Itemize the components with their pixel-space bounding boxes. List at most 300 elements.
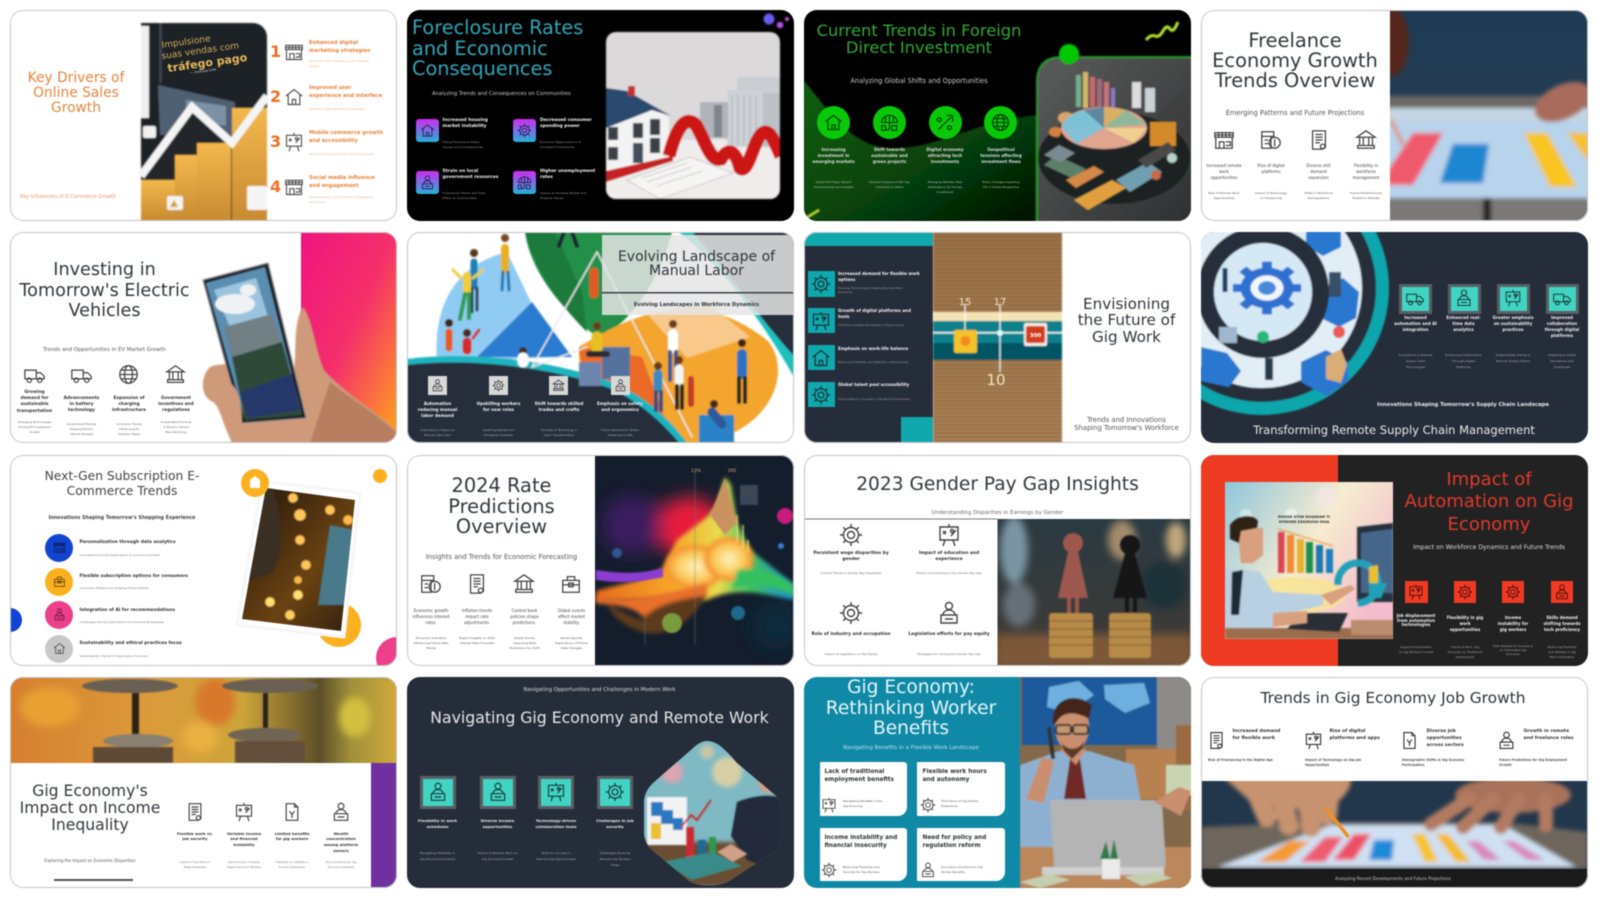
title — [20, 783, 160, 834]
item text 4: Adapting to Global — [1548, 352, 1576, 356]
illustration: sales chart photo: tráfego pago — [167, 51, 248, 75]
item heading 3: government resources — [442, 175, 498, 180]
title: Overview — [456, 515, 547, 538]
item heading 1 — [1394, 314, 1437, 332]
item text 4 — [308, 195, 374, 204]
item text 2: impact rate — [465, 614, 489, 619]
item heading 1: sustainable — [20, 402, 49, 407]
item heading 2: experience — [935, 557, 963, 562]
box text 1: Gig Economy — [843, 804, 863, 808]
item text 4: Trades and Crafts — [607, 432, 633, 436]
box text 1 — [843, 798, 882, 808]
item heading 2: time data — [1452, 320, 1475, 326]
icon: board — [821, 797, 837, 813]
item text 2 — [868, 180, 910, 188]
icon: document — [1207, 731, 1226, 750]
item text 3: Sustainability Trends in — [1496, 352, 1530, 356]
item heading 2: spending power — [540, 124, 580, 129]
panel: electric vehicles — [10, 232, 397, 443]
item heading 2 — [481, 818, 514, 830]
item note 2 — [459, 636, 495, 646]
item text 3: Destinations for Foreign — [928, 184, 962, 188]
title — [1078, 296, 1175, 346]
item text 4: Economy Inequality — [328, 864, 354, 868]
title — [412, 16, 583, 80]
subtitle: Exploring the Impact on Economic Disparities — [44, 858, 136, 863]
icon tile 4 — [513, 171, 536, 194]
item text 1: Increased remote — [1206, 163, 1242, 168]
item heading 4: Government — [161, 396, 191, 401]
title: 2024 Rate — [452, 474, 551, 497]
item text 1: Dynamics — [838, 290, 852, 294]
icon: delivery truck — [24, 364, 45, 385]
box heading 1 — [824, 768, 894, 784]
item text 1: on Gig Workers' Income — [1399, 650, 1433, 654]
icon: umbrella — [517, 176, 532, 190]
item heading 3: Technology-driven — [536, 818, 576, 823]
item heading 3: practices — [1502, 326, 1524, 332]
title — [19, 260, 190, 322]
item heading 2: work — [1459, 621, 1471, 626]
item text 3: Foreclosure Trends and Their — [442, 190, 486, 194]
item text 4: Impact on Housing Market and — [540, 190, 586, 194]
panel: 2024 rate predictions — [407, 455, 794, 666]
item heading 1: labor demand — [421, 412, 454, 418]
icon tile 1 — [1405, 581, 1428, 603]
item note 1: Rise of Remote Work — [1208, 191, 1240, 195]
item heading 2: green projects — [873, 159, 906, 164]
title: Gig Economy's — [32, 782, 148, 800]
title: Impact of — [1446, 468, 1532, 490]
title — [1212, 29, 1378, 92]
title — [45, 468, 199, 498]
item text 4: Remote Gig Workers — [600, 857, 630, 861]
item text 3: Labor Transformation — [544, 432, 574, 436]
item text 1: Evolving Technologies Shaping Remote Work — [838, 286, 903, 290]
item text 2 — [478, 850, 518, 862]
item heading 1 — [308, 39, 371, 54]
panel: key drivers of online sales growth — [10, 10, 397, 221]
item text 2: Sectoral Analysis of FDI: Key — [869, 180, 910, 184]
item heading 1: Personalization through data analytics — [80, 540, 176, 545]
item heading 1: investment in — [818, 153, 849, 158]
illustration: dark sidebar and wood timeline: 15 — [959, 297, 971, 308]
subtitle: Analyzing Global Shifts and Opportunities — [850, 76, 988, 84]
item text 3: Skills for Success in — [541, 851, 571, 855]
item heading 2 — [227, 830, 261, 848]
item heading 4: Higher unemployment — [540, 168, 595, 174]
box text 4: Worker Benefits — [941, 870, 965, 874]
icon: growth arrow — [936, 114, 954, 131]
item heading 1: from automation — [1397, 618, 1435, 623]
box heading 3 — [824, 834, 897, 851]
icon tile 4 — [1551, 581, 1573, 603]
icon tile 3 — [416, 171, 439, 194]
item text 4: Property Values — [540, 196, 563, 200]
item text 1: Enhanced User Experience and Website — [309, 59, 369, 63]
item text 1: rates. — [425, 620, 437, 625]
icon: tools — [1308, 129, 1330, 151]
subtitle: Navigating Opportunities and Challenges in Modern Work — [523, 687, 676, 693]
title: Gig Economy: — [847, 677, 975, 698]
subtitle: Impact on Workforce Dynamics and Future Trends — [1413, 544, 1565, 551]
item note 2 — [1255, 191, 1287, 202]
title: Impact on Income — [20, 799, 160, 817]
title: 2023 Gender Pay Gap Insights — [856, 474, 1139, 494]
item text 2: Factors Contributing to the Gender Pay Gap — [916, 570, 982, 574]
item text 2: Shaping Electric — [70, 427, 93, 431]
illustration: tilted photo and decorative circles — [10, 468, 398, 666]
subtitle: Key Influencers of E-Commerce Growth — [20, 194, 116, 200]
icon tile 2 — [808, 308, 834, 333]
title — [618, 250, 775, 278]
item text 1: influences interest — [412, 614, 450, 619]
illustration: people on pie chart — [407, 232, 794, 443]
item heading 3: Emphasis on work-life balance — [838, 346, 908, 351]
title: Trends in Gig Economy Job Growth — [1261, 689, 1525, 707]
item text 2 — [67, 422, 96, 437]
icon: briefcase — [560, 573, 582, 595]
item heading 1: technologies — [1402, 622, 1430, 627]
item text 2 — [483, 428, 514, 438]
item heading 4 — [308, 174, 376, 189]
icon: regulation columns — [165, 364, 186, 385]
item text 4: management — [1353, 175, 1379, 180]
panel: foreclosure rates — [407, 10, 794, 221]
item heading 3 — [442, 168, 499, 180]
icon: data board — [1504, 289, 1522, 307]
item text 3: Balancing Flexibility and Stability in Remote Jobs — [838, 360, 909, 364]
item heading 2: Upskilling workers — [477, 400, 520, 406]
item text 1 — [1399, 352, 1432, 370]
box heading 1: employment benefits — [824, 777, 894, 783]
panel: manual labor — [407, 232, 794, 443]
illustration: dark sidebar and wood timeline: 300 — [1030, 333, 1041, 339]
item text 1: Impact of Gig Work on — [180, 860, 210, 864]
item text 2 — [1305, 758, 1361, 768]
item text 1 — [18, 420, 51, 434]
item text 2: Government Policies — [67, 422, 96, 426]
icon frame 3 — [1497, 284, 1530, 314]
icon: craft — [552, 379, 565, 392]
illustration: dark sidebar and wood timeline: 17 — [994, 297, 1006, 308]
icon: store — [284, 88, 304, 106]
number 2: 2 — [270, 87, 281, 106]
panel: rethinking worker benefits — [804, 677, 1191, 888]
item note 1: Influencing Future Rate — [414, 640, 448, 644]
item heading 3 — [1492, 314, 1534, 332]
icon: people — [1554, 584, 1570, 600]
item note 4: Rate Changes — [561, 646, 582, 650]
item note 3 — [509, 636, 540, 650]
item heading 3: Integration of AI for recommendations — [80, 608, 175, 613]
number 1: 1 — [270, 42, 281, 61]
item text 2 — [540, 140, 582, 149]
item heading 4: Legislative efforts for pay equity — [908, 632, 990, 637]
box text 3: Security for Gig Workers — [843, 870, 880, 874]
item heading 4: investment flows — [981, 159, 1021, 164]
item heading 2: Enhanced real- — [1446, 314, 1481, 320]
item text 1 — [412, 608, 450, 626]
icon: presentation board — [937, 523, 961, 547]
item text 2: Gig Economy: A Double- — [228, 860, 260, 864]
item heading 3: trades and crafts — [539, 406, 579, 412]
item text 3: Challenges Facing Subscription E-commerce Businesses — [80, 620, 164, 624]
item heading 3 — [535, 400, 583, 412]
illustration: ring with blue gear network — [1201, 232, 1588, 443]
item text 4: Policy Solutions for Gig — [326, 860, 356, 864]
item text 2 — [462, 608, 492, 626]
item note 3: Global Events — [514, 636, 535, 640]
item heading 3: infrastructure — [112, 408, 146, 413]
number 3: 3 — [270, 132, 281, 151]
item heading 4: and ergonomics — [601, 406, 639, 412]
item text 2: Enhancing Collaboration — [1445, 352, 1482, 356]
item heading 2 — [870, 146, 908, 165]
item heading 2 — [308, 84, 382, 99]
box heading 2: and autonomy — [922, 777, 969, 783]
item text 1: Global FDI Flows: Recent — [816, 180, 851, 184]
icon circle 1 — [45, 534, 73, 562]
icon: gears — [811, 385, 831, 405]
box heading 2 — [922, 768, 987, 784]
title: Growth — [51, 100, 101, 116]
icon: board — [811, 311, 831, 331]
icon: spending gear — [517, 123, 532, 138]
item text 3: Economy — [1506, 652, 1520, 656]
item text 4: Techniques — [309, 200, 326, 204]
item text 3: Mobile Commerce Growth and Accessibility — [309, 152, 374, 156]
item note 1 — [1208, 191, 1240, 202]
box text 4: Innovative Solutions for Gig — [941, 864, 983, 868]
item text 4: in Electric Vehicle — [163, 424, 189, 428]
item text 2: Impact of Technology on Gig Job — [1305, 758, 1361, 762]
item note 4 — [1350, 191, 1382, 202]
icon: social camera — [284, 179, 304, 196]
item text 1 — [308, 59, 370, 68]
item heading 2: in battery — [70, 402, 93, 407]
item text 2: Economic Repercussions of — [540, 140, 581, 144]
item heading 1: schedules — [427, 824, 448, 829]
item text 2: platforms — [1261, 169, 1281, 174]
item text 3 — [442, 190, 486, 200]
item heading 4: tensions affecting — [980, 153, 1022, 158]
illustration: dark sidebar and wood timeline: 10 — [986, 371, 1006, 389]
item heading 2 — [64, 396, 99, 415]
illustration: house and red ribbon photo — [604, 12, 790, 200]
item note 3 — [1304, 191, 1333, 202]
item text 2 — [1257, 163, 1285, 175]
item heading 1: marketing strategies — [309, 48, 370, 54]
item text 4: Policy Changes Impacting — [982, 180, 1020, 184]
item text 3: Emerging Markets: New — [928, 180, 962, 184]
item heading 1 — [812, 147, 856, 165]
box heading 3: financial insecurity — [824, 843, 887, 849]
item text 4 — [161, 420, 191, 434]
title: Manual Labor — [649, 262, 744, 278]
item heading 1: Increased demand for flexible work — [838, 271, 920, 276]
item text 1: Economic growth — [414, 608, 448, 613]
icon: safety — [614, 379, 627, 392]
item heading 3: Greater emphasis — [1492, 314, 1534, 320]
icon tile 4 — [611, 376, 630, 395]
illustration: hand marking bar chart — [1200, 780, 1588, 888]
item text 2: Industries to Watch — [875, 184, 904, 188]
item heading 3: charging — [118, 402, 140, 407]
title: Freelance — [1248, 29, 1342, 52]
icon tile 4 — [808, 382, 834, 407]
item heading 4 — [540, 168, 596, 180]
item text 3: Income Distribution — [279, 864, 305, 868]
item text 4: Sustainability Trends in Subscription Services — [80, 654, 147, 658]
subtitle: Trends and Opportunities in EV Market Growth — [43, 347, 166, 353]
item note 4 — [555, 636, 588, 650]
item heading 4 — [324, 830, 358, 854]
item text 3 — [276, 860, 308, 870]
icon circle 3 — [929, 106, 962, 139]
box text 1: Navigating Benefits in the — [843, 798, 882, 802]
title: Direct Investment — [846, 38, 992, 57]
item heading 2: experience and interface — [309, 93, 382, 99]
illustration: sales chart photo: suas vendas com — [161, 41, 240, 62]
title: Inequality — [51, 816, 129, 834]
item heading 2: Diverse income — [481, 818, 514, 823]
item heading 3 — [926, 146, 964, 164]
icon circle 2 — [45, 568, 73, 596]
item note 3: Predictions for 2024 — [509, 646, 540, 650]
item text 2: Economy vs. Traditional — [1448, 650, 1482, 654]
item heading 3: on sustainability — [1494, 320, 1532, 326]
item text 3: predictions. — [513, 620, 536, 625]
title: Consequences — [412, 57, 552, 80]
item text 2: adjustments. — [464, 620, 490, 625]
item text 4 — [601, 428, 639, 438]
item text 3 — [116, 422, 142, 437]
item text 3: Remote Supply Chains — [1496, 358, 1530, 362]
item heading 1 — [813, 550, 889, 564]
item heading 4 — [596, 818, 634, 830]
illustration: dark sidebar and wood timeline — [804, 232, 1191, 443]
item heading 4: and engagement — [309, 183, 358, 189]
item text 4: Future Predictions for Gig Employment — [1499, 758, 1567, 762]
illustration: rainbow data terrain: 295 — [728, 468, 736, 474]
item text 2: Increased Foreclosures — [540, 145, 574, 149]
item heading 1 — [17, 390, 52, 415]
item heading 1 — [1397, 614, 1435, 628]
item heading 4: shifting towards — [1544, 621, 1580, 626]
item text 4: Today — [611, 863, 619, 867]
item heading 2: opportunities — [1450, 627, 1480, 632]
icon: file — [1400, 731, 1419, 750]
item heading 4: incentives and — [158, 402, 194, 407]
title — [28, 70, 126, 116]
item heading 1: integration — [1403, 326, 1428, 332]
item heading 4 — [980, 146, 1022, 164]
item text 2: Through Digital — [1452, 358, 1475, 362]
item text 4: FDI: A Global Perspective — [983, 184, 1019, 188]
title: Evolving Landscape of — [618, 248, 775, 264]
item heading 1: automation and AI — [1394, 320, 1437, 326]
item text 4: Personalization and Customer Engagement — [309, 195, 374, 199]
item text 2: Effective Digital Marketing Strategies — [309, 107, 365, 111]
item heading 4: collaboration — [1547, 320, 1577, 326]
item heading 3 — [275, 830, 309, 842]
item heading 3: Mobile commerce growth — [309, 130, 383, 136]
item text 4: Manufacturing — [166, 430, 186, 434]
icon: umbrella — [880, 114, 899, 132]
item heading 3: collaboration tools — [535, 824, 577, 829]
item text 3 — [927, 180, 963, 194]
item text 3: Influencing EV — [119, 427, 139, 431]
item text 3 — [536, 850, 576, 862]
box text 4 — [941, 864, 983, 874]
item note 4: Sector-Specific — [560, 636, 583, 640]
panel: foreign direct investment — [804, 10, 1191, 221]
item text 1 — [813, 180, 854, 189]
icon: speaker — [1497, 731, 1516, 750]
item text 2: Edged Sword for Workers — [227, 864, 261, 868]
item heading 2: sustainable and — [871, 153, 908, 158]
title: Economy — [1448, 514, 1530, 534]
icon tile 2 — [1454, 581, 1476, 603]
subtitle: Analyzing Trends and Consequences on Communities — [432, 91, 571, 97]
item text 1 — [838, 286, 903, 295]
item heading 3: Diverse job — [1426, 729, 1456, 734]
illustration: man on phone with laptop — [1019, 676, 1192, 889]
subtitle: Shaping Tomorrow's Workforce — [1074, 424, 1179, 432]
item heading 4: rates — [540, 175, 553, 180]
item heading 2 — [919, 550, 979, 564]
item heading 2 — [540, 116, 592, 129]
icon tile 1 — [808, 271, 834, 297]
title: the Future of — [1078, 311, 1175, 329]
icon tile 1 — [416, 119, 439, 142]
item text 1 — [1206, 163, 1242, 181]
item text 4 — [1499, 758, 1567, 768]
item heading 2 — [477, 400, 520, 412]
item heading 1: for flexible work — [1232, 736, 1275, 741]
item heading 3: Digital economy — [926, 147, 964, 152]
subtitle: Navigating Benefits in a Flexible Work Landscape — [843, 744, 979, 750]
icon: truck — [1406, 289, 1424, 307]
icon frame 1 — [1399, 284, 1432, 314]
item heading 4: Wealth — [333, 830, 349, 836]
item heading 4: Skills demand — [1546, 615, 1578, 620]
item text 1 — [180, 860, 210, 870]
item text 2 — [1445, 352, 1482, 370]
benefit box 1 — [820, 762, 906, 816]
icon: free truck — [71, 364, 92, 385]
item text 1: Growth — [29, 430, 40, 434]
illustration: sales chart photo: Impulsione — [161, 34, 212, 51]
item heading 2: Decreased consumer — [540, 118, 592, 122]
item note 4: Freelance Markets — [1352, 196, 1380, 200]
icon tile 1 — [428, 376, 447, 395]
item heading 1: market instability — [442, 124, 487, 129]
panel: gig economy job growth — [1201, 677, 1588, 888]
icon tile 3 — [549, 376, 568, 395]
icon: idea gears — [839, 523, 863, 547]
item text 3: Skills Needed for Success in — [1493, 644, 1533, 648]
item text 1: Manual Labor Jobs — [424, 432, 451, 436]
icon: robot — [431, 379, 444, 392]
icon: devices — [285, 132, 303, 152]
panel: automation on gig economy — [1201, 455, 1588, 666]
item heading 3: opportunities — [1426, 736, 1462, 741]
item heading 4: Challenges in job — [596, 818, 634, 823]
item text 3: Effect on Communities — [442, 196, 477, 200]
item heading 1: Growing — [24, 390, 45, 395]
